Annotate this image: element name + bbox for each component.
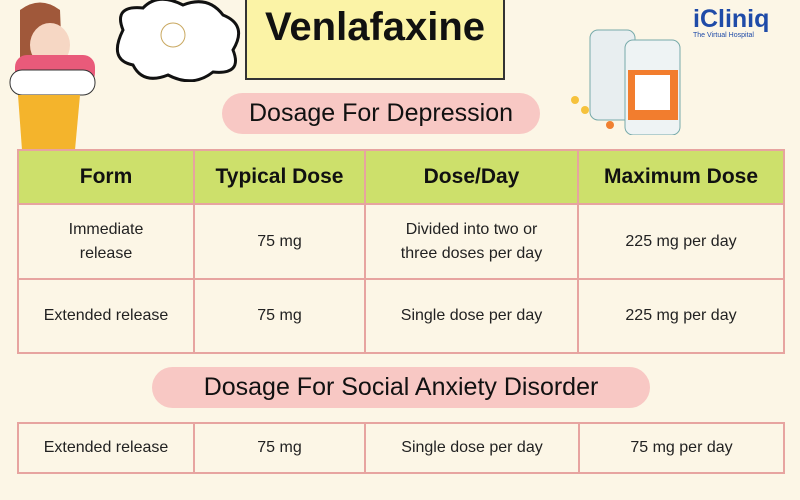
table: depression: three doses per day (401, 244, 542, 262)
table: depression: Typical Dose (216, 165, 344, 188)
heading: social anxiety (152, 367, 650, 408)
logo: iCliniq (693, 5, 769, 33)
table: depression: Extended release (44, 307, 168, 324)
table: depression: Dose/Day (424, 165, 519, 188)
table: depression (17, 149, 785, 354)
title scroll (245, 0, 505, 80)
heading: depression: Dosage For Depression (249, 99, 513, 127)
table: depression: Single dose per day (401, 307, 542, 324)
table: depression: 75 mg (257, 307, 302, 324)
illustration: sad woman (10, 2, 96, 149)
illustration: thought cloud (116, 0, 240, 82)
heading: depression (222, 93, 540, 134)
logo: The Virtual Hospital (693, 32, 754, 39)
table: social anxiety: 75 mg (257, 439, 302, 456)
table: depression: 225 mg per day (625, 307, 737, 324)
table: depression: release (80, 244, 132, 262)
table: social anxiety: 75 mg per day (630, 439, 733, 456)
table: social anxiety (17, 422, 785, 474)
illustration: pill bottles (571, 30, 680, 135)
table: depression: Form (80, 165, 132, 188)
table: depression: 75 mg (257, 232, 302, 250)
heading: social anxiety: Dosage For Social Anxiety Disorder (204, 373, 598, 401)
table: social anxiety: Single dose per day (401, 439, 543, 456)
table: depression: Immediate (69, 220, 143, 238)
table: depression: Maximum Dose (604, 165, 758, 188)
table: depression: Divided into two or (406, 220, 537, 238)
table: social anxiety: Extended release (44, 439, 168, 456)
title: Venlafaxine (265, 5, 485, 49)
table: depression: 225 mg per day (625, 232, 737, 250)
